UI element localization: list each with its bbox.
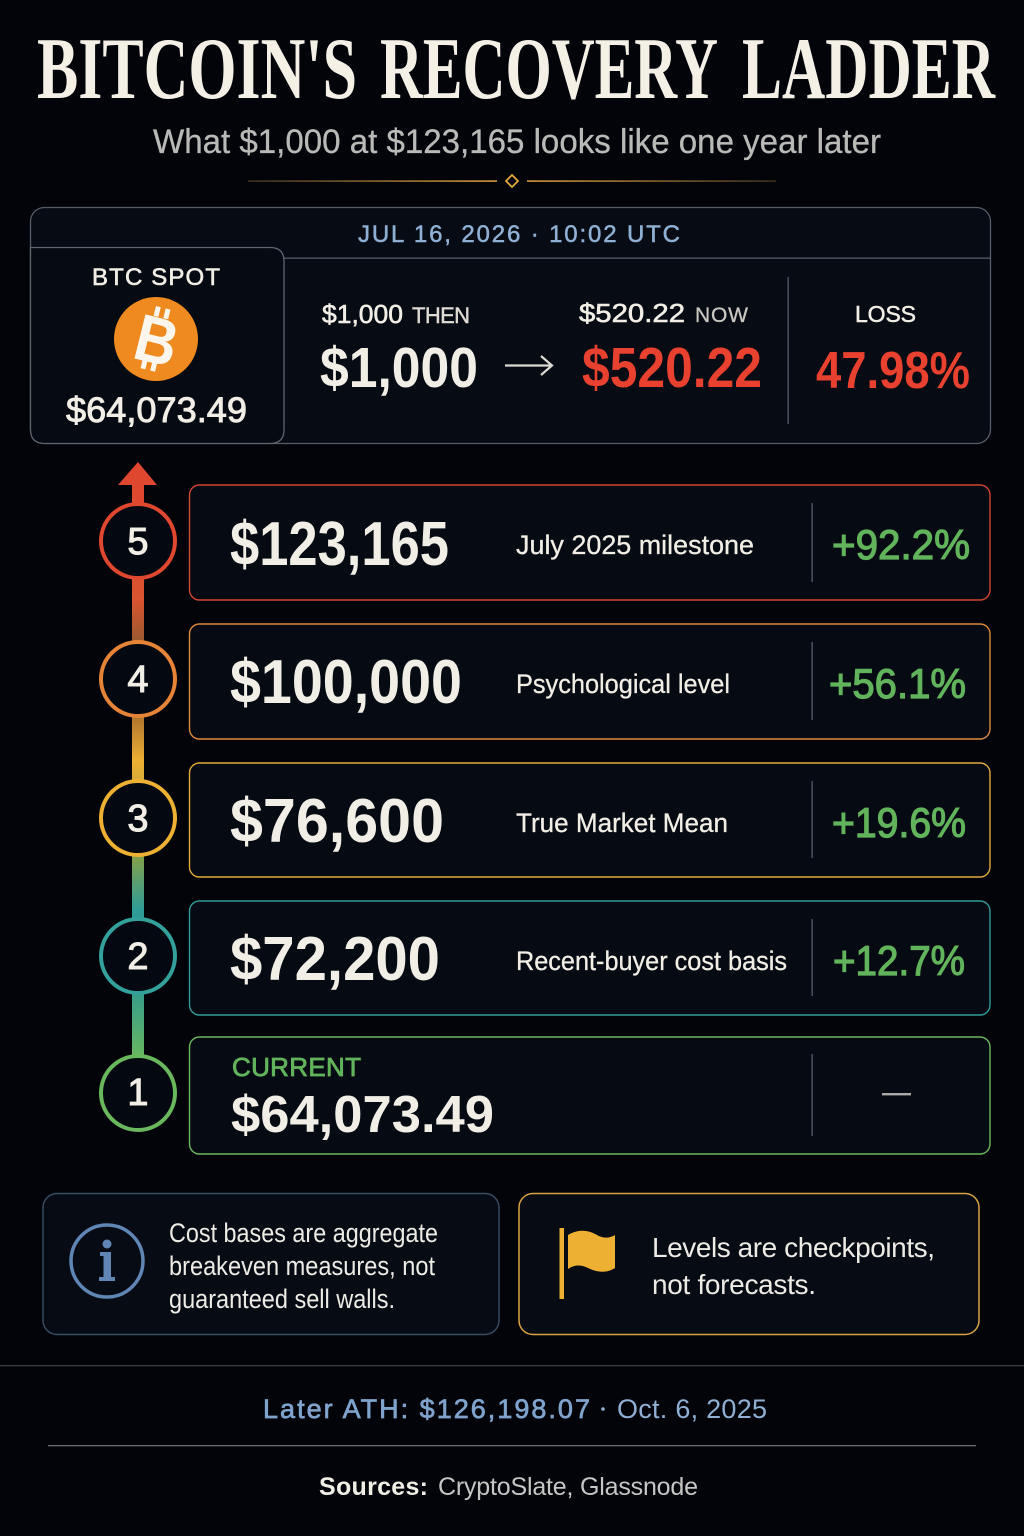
stat: then	[320, 299, 478, 400]
step marker 2	[101, 919, 175, 993]
stat: now: NOW	[695, 304, 748, 327]
arrow: then to now	[505, 356, 552, 375]
step marker 2: 2	[127, 936, 149, 978]
later ATH line	[263, 1394, 767, 1424]
rung: $72,200: +12.7%	[833, 937, 965, 984]
stat: then: $1,000	[322, 299, 403, 329]
stat: now	[579, 298, 762, 400]
rung: $100,000: Psychological level	[516, 669, 730, 699]
rung: $123,165	[190, 485, 990, 600]
step 1	[101, 1037, 990, 1154]
rung: $100,000: $100,000	[230, 648, 462, 717]
step 3	[101, 763, 990, 877]
rung: $76,600: True Market Mean	[516, 808, 728, 838]
later ATH line: Oct. 6, 2025	[617, 1394, 767, 1424]
BTC spot price: $64,073.49	[66, 391, 247, 430]
icon: flag	[560, 1228, 615, 1299]
rung: current price	[190, 1037, 990, 1154]
stat: then: THEN	[412, 303, 470, 328]
subtitle: What $1,000 at $123,165 looks like one year later	[153, 123, 881, 161]
step marker 3: 3	[127, 798, 149, 840]
note: cost bases	[43, 1194, 499, 1334]
rung: $76,600	[190, 763, 990, 877]
note text	[169, 1218, 438, 1314]
stat: now: $520.22	[582, 336, 762, 400]
rung: $123,165: +92.2%	[832, 521, 970, 568]
date and time: JUL 16, 2026 · 10:02 UTC	[358, 221, 680, 248]
note text: Levels are checkpoints,	[652, 1232, 935, 1263]
sources: Sources:	[319, 1473, 428, 1501]
step 5	[101, 485, 990, 600]
step 2	[101, 901, 990, 1015]
rung: $123,165: $123,165	[230, 510, 449, 579]
rung: $72,200	[190, 901, 990, 1015]
stat: loss	[816, 301, 970, 400]
title divider with diamond	[248, 175, 776, 187]
step marker 5	[101, 504, 175, 578]
stat: loss: LOSS	[855, 301, 916, 327]
BTC spot label: BTC SPOT	[92, 264, 220, 291]
icon: bitcoin coin: B	[127, 299, 186, 381]
title	[37, 21, 996, 118]
rung: $100,000	[190, 624, 990, 739]
step marker 1: 1	[127, 1072, 149, 1114]
later ATH line: Later ATH: $126,198.07	[263, 1394, 590, 1424]
note text	[652, 1232, 935, 1300]
rung: $100,000: +56.1%	[829, 660, 966, 707]
rung: $76,600: +19.6%	[832, 799, 966, 846]
step 4	[101, 624, 990, 739]
panel: snapshot	[30, 208, 990, 444]
stat: now: $520.22	[579, 298, 685, 328]
rung: $123,165: July 2025 milestone	[516, 530, 754, 560]
sources: CryptoSlate, Glassnode	[438, 1473, 698, 1501]
icon: info	[71, 1225, 143, 1297]
sources	[319, 1473, 698, 1501]
ladder rail with arrow	[118, 462, 157, 1060]
note text: guaranteed sell walls.	[169, 1284, 395, 1314]
rung: $76,600: $76,600	[230, 787, 444, 856]
rung: current price: $64,073.49	[231, 1086, 494, 1144]
step marker 4	[101, 642, 175, 716]
title: BITCOIN'S	[37, 21, 357, 118]
note text: breakeven measures, not	[169, 1251, 435, 1281]
step marker 5: 5	[127, 521, 149, 563]
rung: $72,200: Recent-buyer cost basis	[516, 946, 787, 976]
note: checkpoints	[519, 1194, 979, 1334]
step marker 4: 4	[127, 659, 149, 701]
rung: $72,200: $72,200	[230, 925, 440, 994]
note text: Cost bases are aggregate	[169, 1218, 438, 1248]
note text: not forecasts.	[652, 1269, 816, 1300]
step marker 1	[101, 1056, 175, 1130]
stat: loss: 47.98%	[816, 342, 970, 400]
title: RECOVERY	[380, 21, 718, 118]
step marker 3	[101, 781, 175, 855]
panel: BTC spot	[30, 248, 284, 444]
rung: current price: CURRENT	[232, 1052, 361, 1082]
stat: then: $1,000	[320, 336, 478, 400]
